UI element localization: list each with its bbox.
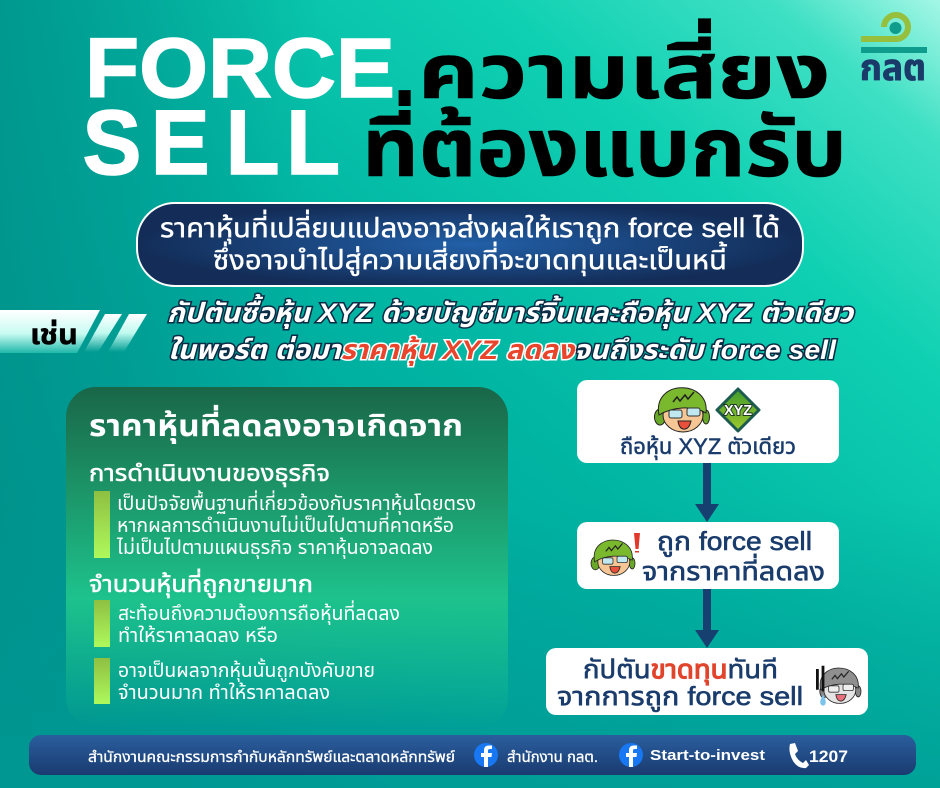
footer: SEC name: สำนักงานคณะกรรมการกำกับหลักทรัพย์และตลาดหลักทรัพย์ — [88, 749, 455, 766]
section: business performance — [89, 460, 476, 559]
flow box 3 — [546, 648, 868, 715]
logo — [860, 15, 927, 88]
callout pill: ราคาหุ้นที่เปลี่ยนแปลงอาจส่งผลให้เราถูก force sell ได้ — [160, 209, 780, 244]
footer: Start-to-invest: Start-to-invest — [650, 748, 765, 764]
section: heavy selling: จำนวนหุ้นที่ถูกขายมาก — [89, 568, 313, 599]
callout pill: ซึ่งอาจนำไปสู่ความเสี่ยงที่จะขาดทุนและเป็นหนี้ — [213, 241, 727, 276]
section: heavy selling: อาจเป็นผลจากหุ้นนั้นถูกบังคับขาย — [118, 658, 375, 683]
footer: hotline: 1207 — [809, 747, 848, 766]
arrow: step 1 to 2 — [695, 463, 719, 522]
section: heavy selling: ทำให้ราคาลดลง หรือ — [118, 624, 278, 647]
title: FORCE — [85, 21, 395, 115]
example tag: เช่น — [30, 319, 78, 350]
section: heavy selling — [89, 568, 400, 704]
section: heavy selling: จำนวนมาก ทำให้ราคาลดลง — [118, 681, 330, 704]
icon: worried investor — [591, 540, 635, 575]
step label: กัปตันขาดทุนทันที — [583, 654, 778, 685]
icon: grey sweating investor — [817, 666, 861, 706]
footer bar — [29, 735, 916, 775]
icon: exclamation — [634, 533, 640, 552]
section: business performance: เป็นปัจจัยพื้นฐานที่เกี่ยวข้องกับราคาหุ้นโดยตรง — [117, 490, 476, 515]
panel: causes — [66, 387, 508, 728]
step label: จากราคาที่ลดลง — [642, 553, 825, 586]
flow box 1 — [577, 380, 839, 463]
icon: phone — [789, 743, 809, 768]
arrow: step 2 to 3 — [695, 589, 719, 648]
section: heavy selling: สะท้อนถึงความต้องการถือหุ้นที่ลดลง — [118, 600, 400, 625]
icon: XYZ stock diamond — [717, 389, 759, 431]
section: business performance: ไม่เป็นไปตามแผนธุรกิจ ราคาหุ้นอาจลดลง — [116, 536, 433, 559]
example text: ในพอร์ต ต่อมา ราคาหุ้น XYZ ลดลง จนถึงระดับ force sell — [168, 335, 837, 367]
example text — [167, 294, 855, 367]
title: ความเสี่ยง — [418, 19, 830, 115]
panel heading: ราคาหุ้นที่ลดลงอาจเกิดจาก — [89, 404, 463, 444]
section: business performance: การดำเนินงานของธุรกิจ — [89, 460, 330, 487]
section: business performance: หากผลการดำเนินงานไม่เป็นไปตามที่คาดหรือ — [117, 512, 454, 537]
footer: SEC facebook: สำนักงาน กลต. — [507, 749, 598, 766]
icon: XYZ stock diamond: XYZ — [724, 402, 752, 419]
step label — [642, 526, 825, 586]
callout pill — [137, 203, 803, 286]
flow box 2 — [577, 522, 839, 589]
step label: ถือหุ้น XYZ ตัวเดียว — [620, 434, 796, 460]
example tag — [0, 310, 147, 353]
step label: ถูก force sell — [657, 526, 812, 557]
title: SELL — [83, 91, 340, 194]
example text: กัปตันซื้อหุ้น XYZ ด้วยบัญชีมาร์จิ้นและถือหุ้น XYZ ตัวเดียว — [167, 294, 855, 330]
step label: จากการถูก force sell — [557, 681, 803, 712]
title — [83, 19, 847, 194]
icon: investor avatar — [654, 388, 710, 432]
title: ที่ต้องแบกรับ — [362, 90, 847, 194]
logo: กลต — [860, 47, 926, 88]
icon: facebook — [474, 743, 498, 767]
step label — [557, 654, 803, 712]
icon: facebook — [619, 743, 643, 767]
